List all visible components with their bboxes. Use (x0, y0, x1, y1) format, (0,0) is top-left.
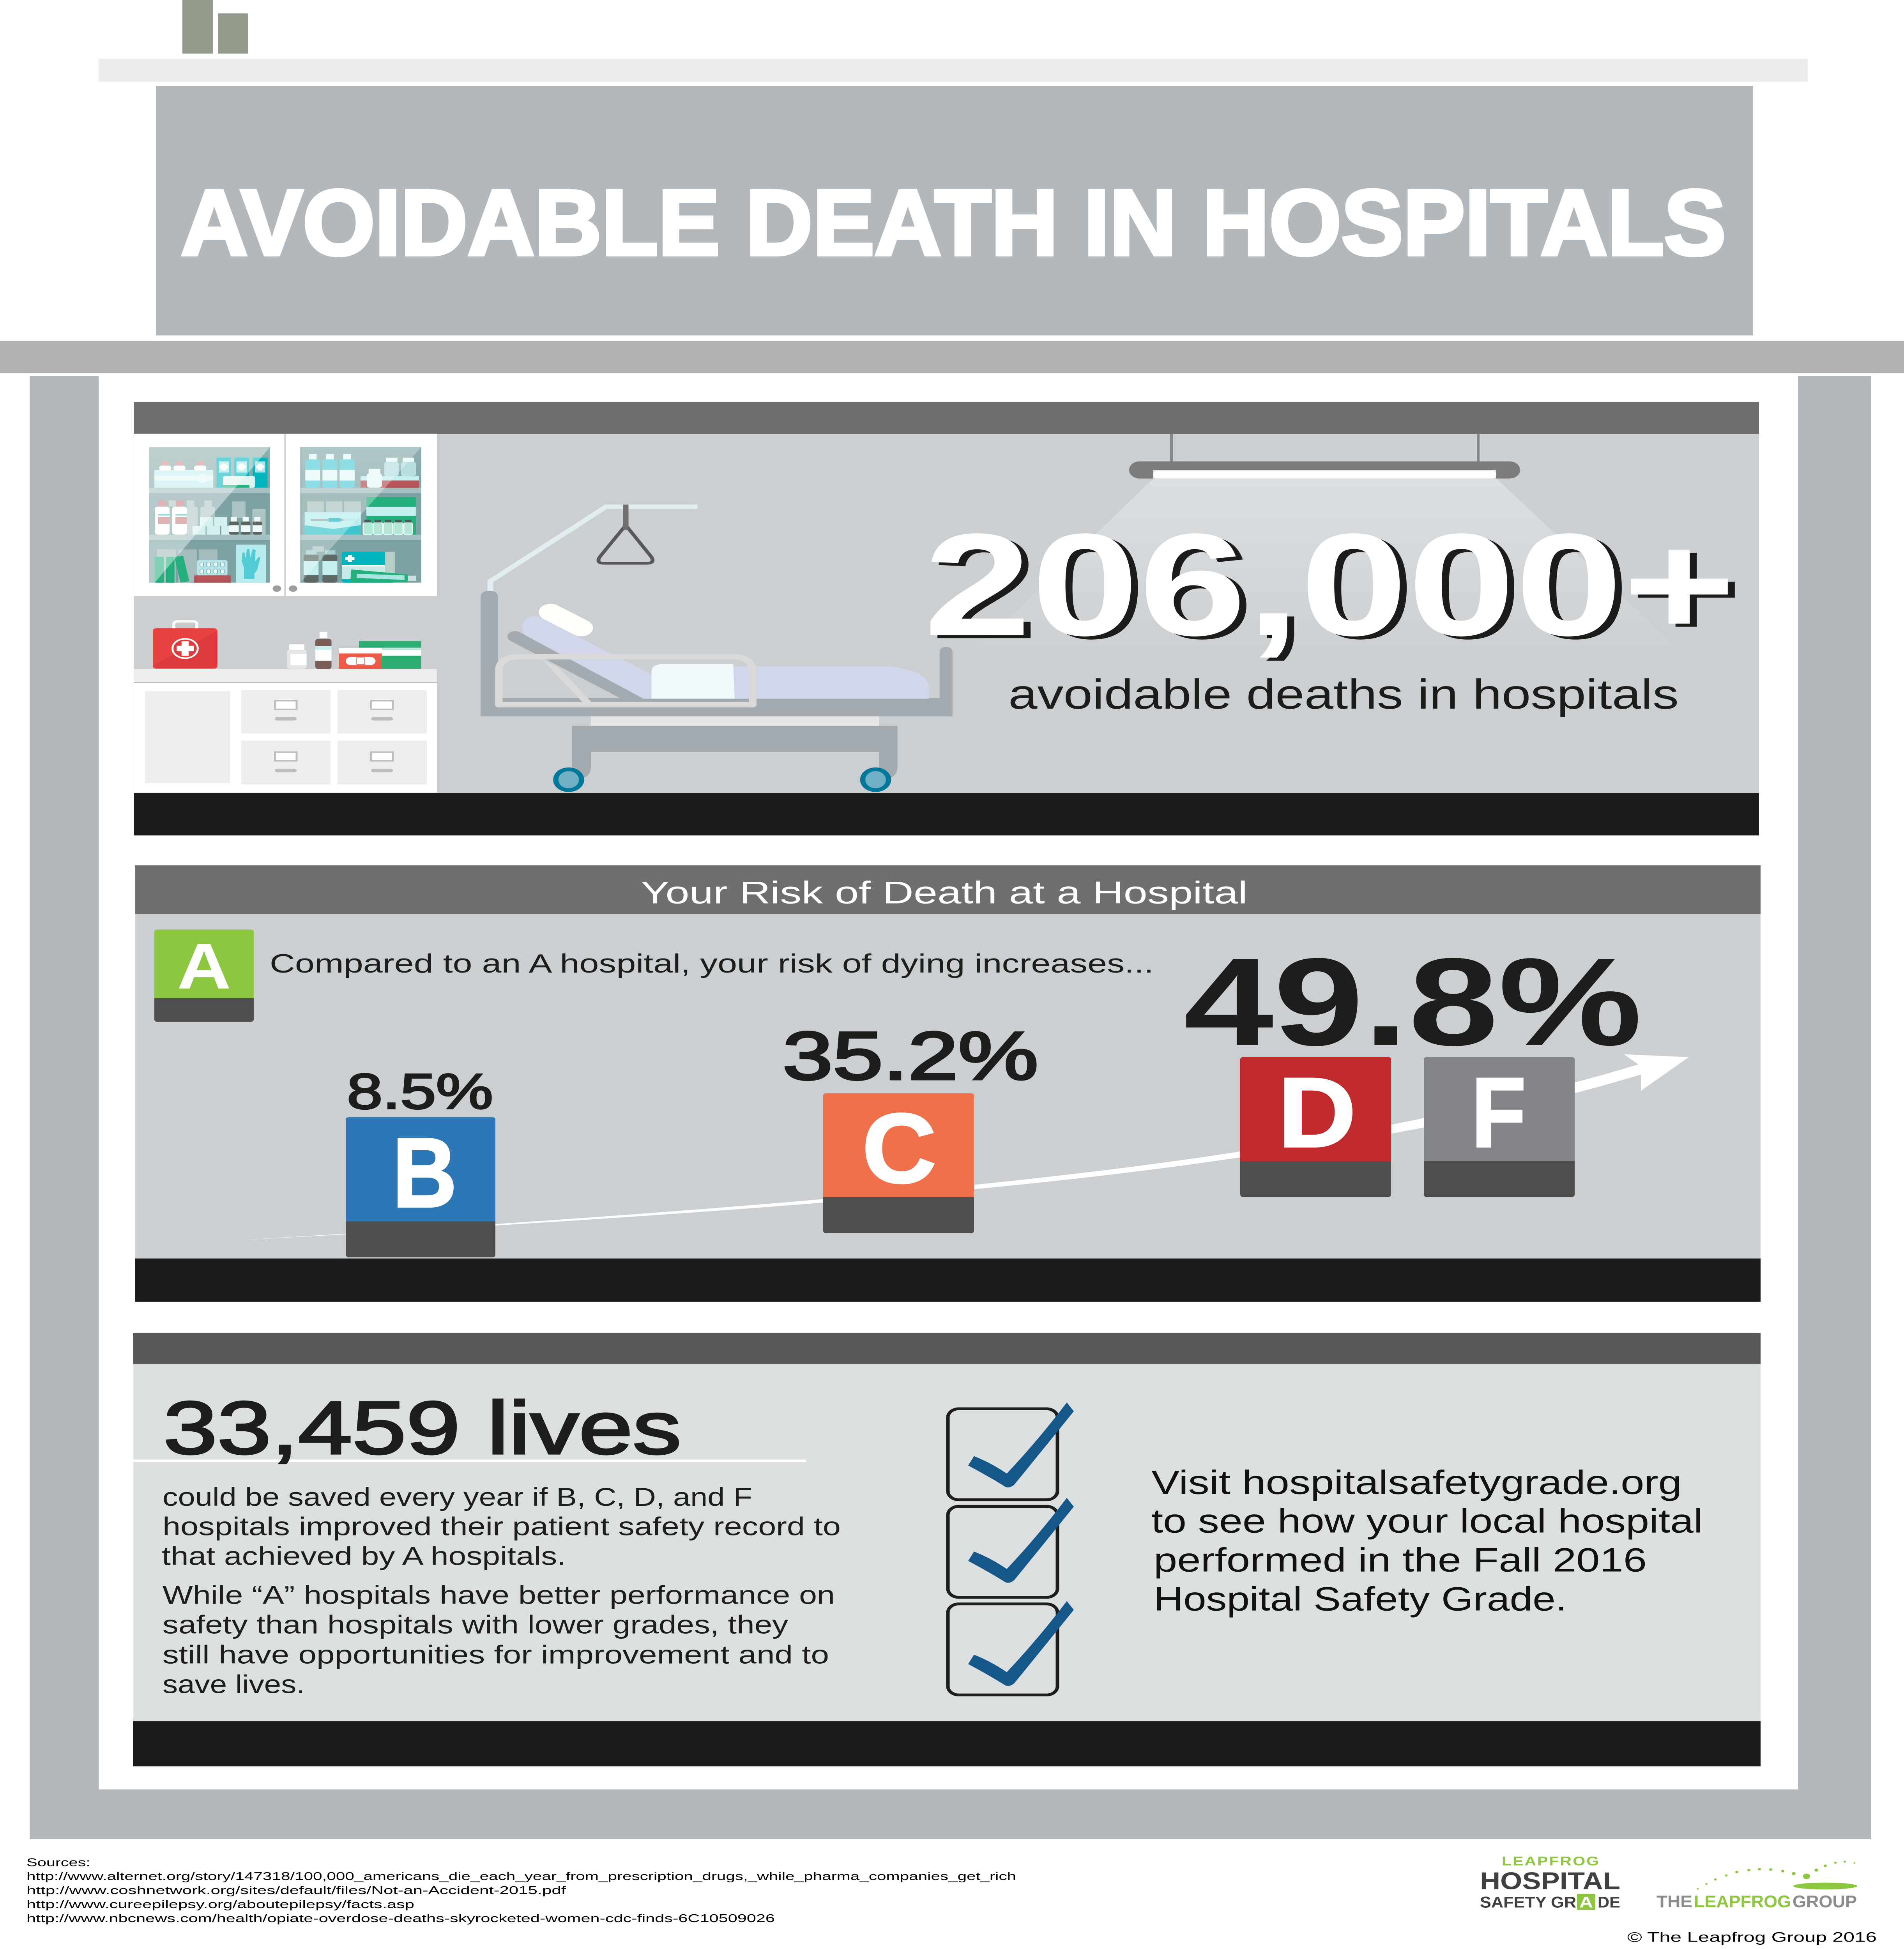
room floor (134, 793, 1759, 835)
lives panel floor (133, 1721, 1761, 1766)
lives paragraph two: still have opportunities for improvement and to (163, 1640, 829, 1669)
underline (133, 1459, 806, 1462)
cabinet doors (134, 434, 437, 596)
value: 8.5%: 8.5% (347, 1063, 493, 1119)
chimney (182, 0, 248, 54)
risk panel background (135, 913, 1761, 1259)
logo: Leapfrog Hospital Safety Grade: A (1579, 1893, 1593, 1911)
grade A block (154, 930, 254, 1022)
call to action text: performed in the Fall 2016 (1154, 1541, 1647, 1579)
bandage box (339, 648, 382, 669)
grade F block: F (1471, 1057, 1526, 1167)
risk description: Compared to an A hospital, your risk of dying increases... (270, 949, 1154, 978)
call to action text: Hospital Safety Grade. (1154, 1580, 1567, 1618)
lives stat: 33,459 lives (163, 1386, 681, 1470)
counter jar (287, 644, 307, 669)
lives paragraph one (162, 1483, 841, 1571)
roof beam (0, 341, 1904, 373)
bed arm (490, 507, 697, 592)
sources: http://www.alternet.org/story/147318/100,000_americans_die_each_year_from_prescription_drugs,_while_pharma_companies_get_rich (27, 1870, 1016, 1882)
grade C block: C (862, 1093, 936, 1203)
grade C block (823, 1093, 974, 1233)
counter top (134, 669, 437, 682)
grade A block: A (177, 930, 231, 1002)
panel: avoidable deaths room (134, 402, 1759, 835)
pillow (551, 612, 581, 628)
value: 49.8%: 49.8% (1184, 932, 1642, 1072)
roof strip (99, 59, 1808, 82)
grade F block (1424, 1057, 1575, 1197)
lives panel background (133, 1364, 1761, 1721)
bed base (572, 716, 898, 779)
sources: http://www.coshnetwork.org/sites/default/files/Not-an-Accident-2015.pdf (27, 1884, 566, 1896)
building walls (30, 376, 1871, 1839)
trapeze handle (598, 505, 652, 563)
risk panel header (135, 865, 1761, 914)
green box (359, 641, 421, 669)
logo: The Leapfrog Group: LEAPFROG (1694, 1892, 1791, 1911)
lives paragraph two: safety than hospitals with lower grades, they (163, 1610, 788, 1639)
lives paragraph two: save lives. (163, 1670, 305, 1699)
stat: 206,000+: 206,000+ (931, 506, 1743, 669)
risk panel heading: Your Risk of Death at a Hospital (641, 875, 1248, 910)
lower cabinet and drawers (134, 683, 437, 792)
copyright: © The Leapfrog Group 2016 (1627, 1930, 1877, 1945)
rising risk arrow (229, 1054, 1689, 1241)
room wall (134, 433, 1759, 793)
left cabinet window (149, 447, 270, 583)
icon: checkboxes (948, 1403, 1074, 1695)
title banner (156, 86, 1753, 336)
logo: The Leapfrog Group: GROUP (1793, 1892, 1857, 1911)
call to action text: Visit hospitalsafetygrade.org (1151, 1463, 1682, 1501)
ceiling lamp (959, 433, 1697, 665)
logo: Leapfrog Hospital Safety Grade: DE (1598, 1893, 1620, 1911)
logo: Leapfrog Hospital Safety Grade: HOSPITAL (1480, 1867, 1620, 1894)
hospital bed (481, 505, 953, 790)
brown bottle (315, 632, 332, 669)
call to action text (1151, 1463, 1703, 1618)
sources: Sources: (27, 1856, 90, 1868)
medicine cabinet and counter (134, 434, 437, 792)
room ceiling band (134, 402, 1759, 434)
lives panel header (133, 1333, 1761, 1364)
logo: Leapfrog Hospital Safety Grade (1480, 1854, 1620, 1911)
mattress (522, 616, 929, 699)
logo: Leapfrog Hospital Safety Grade: SAFETY GR (1480, 1893, 1576, 1911)
bed frame (481, 591, 953, 716)
lives paragraph one: could be saved every year if B, C, D, and F (163, 1483, 752, 1511)
panel: lives saved (133, 1333, 1761, 1766)
sources: http://www.cureepilepsy.org/aboutepilepsy/facts.asp (27, 1898, 414, 1910)
grade B block (346, 1117, 495, 1257)
bed wheels (556, 769, 889, 790)
grade D block: D (1278, 1057, 1356, 1167)
right cabinet window (300, 447, 421, 583)
stat: 206,000+: 206,000+ (924, 503, 1736, 666)
logo: Leapfrog Hospital Safety Grade: LEAPFROG (1502, 1854, 1599, 1868)
risk panel floor (135, 1259, 1761, 1302)
panel: risk of death (135, 865, 1761, 1302)
lives paragraph two (163, 1581, 835, 1699)
lives paragraph one: that achieved by A hospitals. (162, 1542, 566, 1571)
blanket (651, 664, 735, 699)
icon: first aid kit (153, 621, 217, 669)
lives paragraph one: hospitals improved their patient safety record to (163, 1512, 841, 1541)
bed rail (499, 657, 753, 705)
sources: http://www.nbcnews.com/health/opiate-overdose-deaths-skyrocketed-women-cdc-finds-6C10509026 (27, 1912, 775, 1924)
stat caption: avoidable deaths in hospitals (1008, 671, 1679, 718)
backrest (515, 637, 638, 700)
sources (27, 1856, 1016, 1924)
value: 35.2%: 35.2% (783, 1018, 1038, 1094)
grade B block: B (392, 1117, 457, 1228)
logo: The Leapfrog Group (1656, 1861, 1857, 1911)
grade D block (1240, 1057, 1391, 1197)
logo: The Leapfrog Group: THE (1656, 1892, 1692, 1911)
call to action text: to see how your local hospital (1151, 1502, 1703, 1540)
lives paragraph two: While “A” hospitals have better performance on (163, 1581, 835, 1609)
